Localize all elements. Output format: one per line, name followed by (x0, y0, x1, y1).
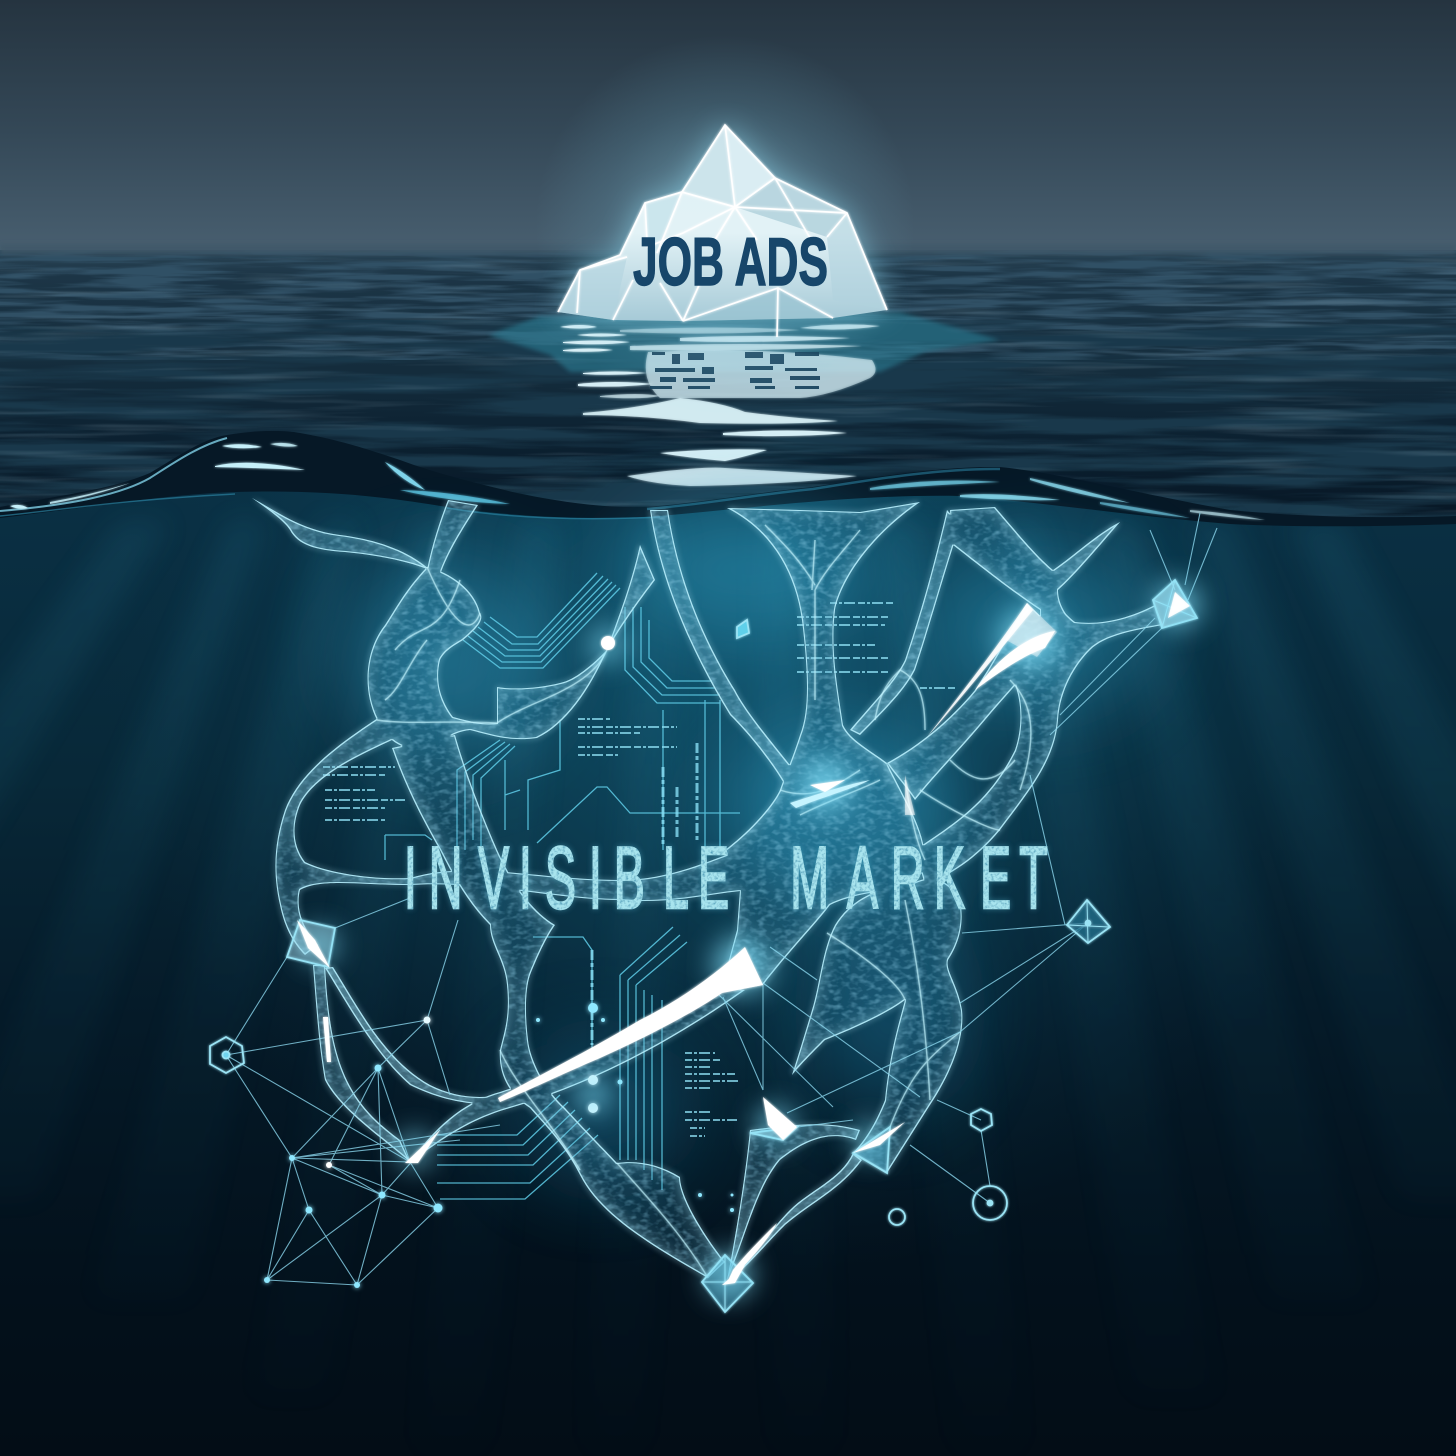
ocean surface (0, 244, 1456, 520)
circuit traces (385, 573, 740, 1199)
upper right diagonal membrane (950, 507, 1120, 622)
neural membrane web (252, 498, 1163, 1282)
white streak membrane (412, 985, 745, 1160)
left arch (650, 510, 790, 785)
top left strand (252, 498, 430, 570)
data readout text lines (323, 603, 955, 1136)
bright circuit dashes (592, 743, 697, 1045)
upper center sliver (607, 545, 655, 650)
glowing point nodes (264, 1003, 734, 1288)
lower right lobe (792, 879, 962, 1173)
label: invisible market: INVISIBLE MARKET (404, 828, 1048, 927)
right ribbon to diamond (915, 580, 1163, 885)
descending trunk (392, 735, 725, 1278)
label: job ads: JOB ADS (633, 224, 828, 300)
iceberg wireframe lines (558, 125, 887, 337)
underwater light rays (0, 526, 1456, 885)
iceberg reflection (488, 312, 1000, 486)
thin ribbon (850, 510, 960, 735)
lower left arm (727, 1124, 860, 1280)
membrane inner fibres (377, 525, 1031, 1278)
water glints (10, 443, 1265, 520)
lower arc (727, 1153, 862, 1282)
iceberg facets (558, 125, 887, 321)
sky background (0, 0, 1456, 262)
bright white highlights (297, 583, 1200, 1297)
ring and diamond nodes (210, 580, 1197, 1312)
wireframe node network (226, 513, 1217, 1285)
left web strand two (325, 967, 520, 1104)
underwater background (0, 488, 1456, 1456)
hidden network glow (350, 510, 1150, 1180)
left strand loop (275, 718, 410, 955)
iceberg (535, 35, 915, 415)
left web strand one (313, 965, 410, 1162)
left lobe (368, 567, 607, 750)
water line meniscus (0, 431, 1456, 526)
horizontal band behind title (410, 850, 760, 901)
central stem and body (720, 502, 925, 993)
top funnel strand (427, 500, 478, 575)
arm to bright node (887, 603, 1057, 800)
